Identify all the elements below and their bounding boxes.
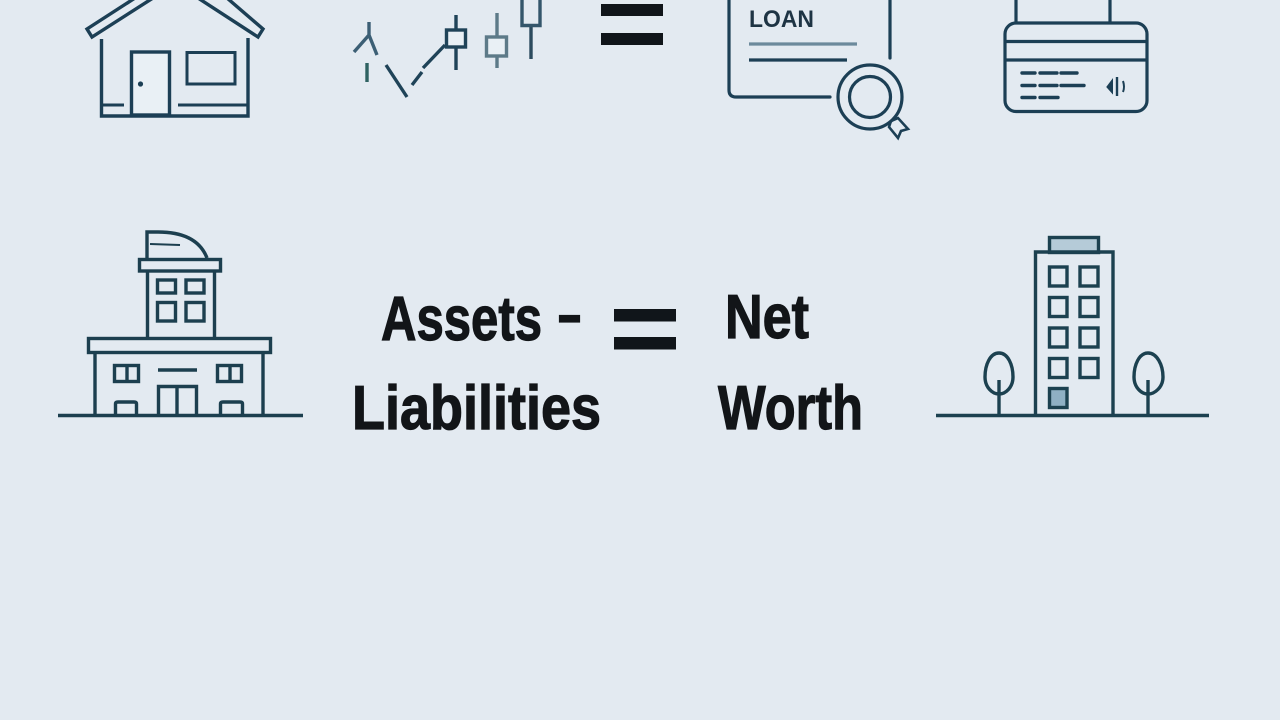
icon: apartment tower with trees <box>936 238 1209 416</box>
icon: main equals sign <box>614 309 676 350</box>
icon: loan document with magnifier: LOAN <box>749 6 814 33</box>
heading: net worth <box>718 283 863 443</box>
heading: net worth: Worth <box>718 374 863 443</box>
heading: assets minus liabilities: Assets <box>381 285 542 354</box>
icon: loan document with magnifier <box>729 0 908 138</box>
heading: assets minus liabilities <box>352 285 601 443</box>
icon: house <box>87 0 263 116</box>
icon: top equals sign <box>601 4 663 45</box>
heading: net worth: Net <box>725 283 809 352</box>
heading: assets minus liabilities: Liabilities <box>352 374 601 443</box>
icon: office building with dome <box>58 232 303 416</box>
icon: candlestick chart <box>354 0 540 97</box>
icon: credit card <box>1005 0 1147 112</box>
